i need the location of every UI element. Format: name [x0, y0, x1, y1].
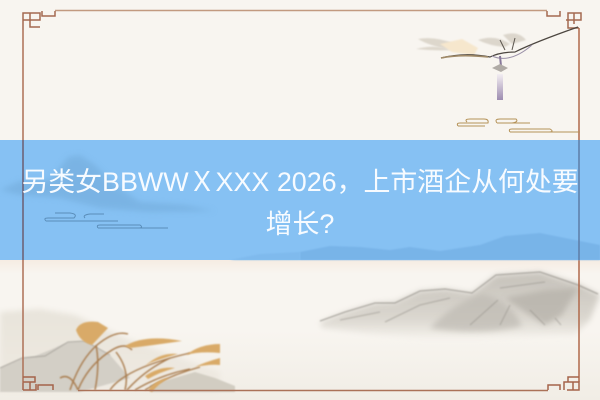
mountain, lower right [320, 272, 600, 338]
band: cloud ornament [45, 213, 168, 228]
reed plumes [76, 322, 220, 392]
corner: top right [547, 11, 581, 28]
band: distant mountains [300, 233, 600, 260]
band: ink mountain [0, 155, 215, 212]
distant hill, lower left [0, 309, 220, 392]
corner: bottom right [548, 377, 579, 390]
corner: bottom left [23, 377, 53, 390]
title [21, 167, 579, 239]
mountain, lower left [0, 341, 235, 392]
reeds [60, 333, 200, 390]
headline band [0, 140, 600, 260]
title: 另类女BBWWＸXXX 2026，上市酒企从何处要 [21, 167, 579, 197]
cloud ornament, top right [457, 119, 580, 132]
title: 增长? [266, 209, 334, 239]
tassel [492, 45, 532, 100]
band: frame lines [22, 140, 24, 260]
magnolia branch [416, 27, 578, 58]
corner: top left [23, 11, 55, 30]
